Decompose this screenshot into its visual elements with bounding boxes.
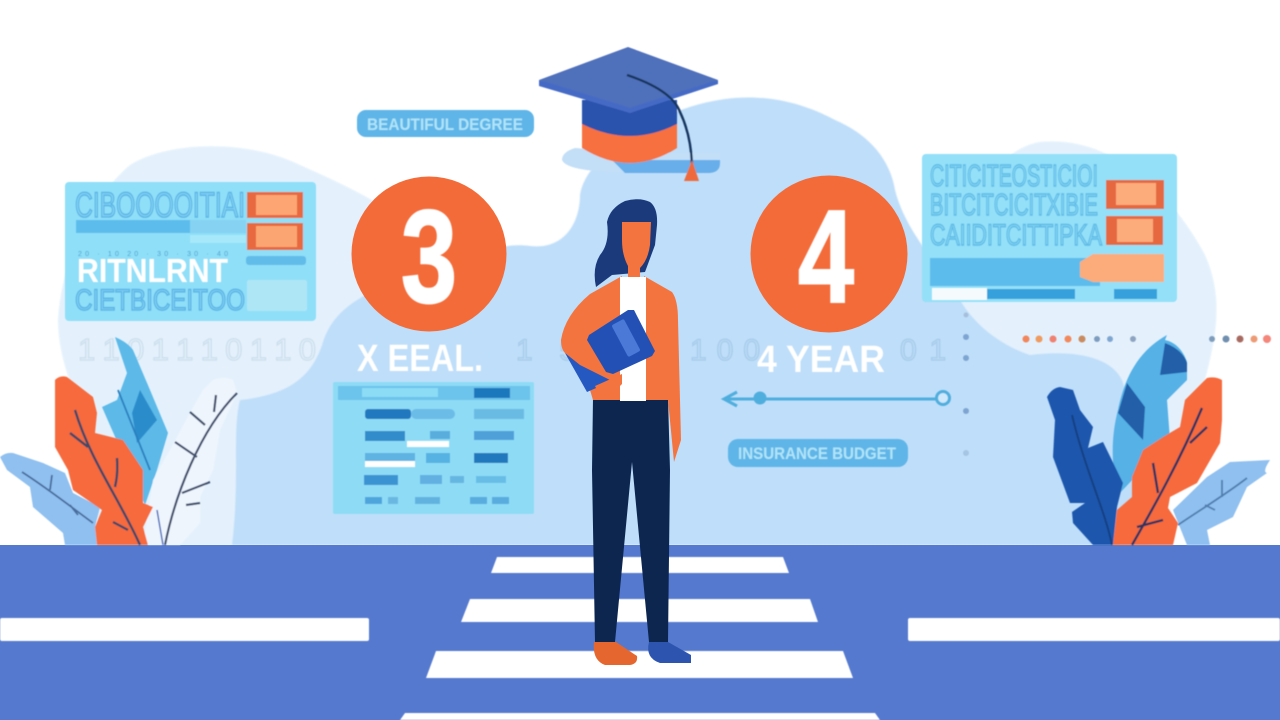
crosswalk stripes xyxy=(400,557,880,720)
background binary text centre: 0 1 xyxy=(900,334,946,367)
book xyxy=(587,310,655,374)
card text lines: CITICITEOSTICIOI xyxy=(930,158,1098,193)
background binary text left: 1 1 0 1 1 1 0 1 1 0 xyxy=(78,332,316,367)
book back xyxy=(565,353,612,392)
panel: right data card xyxy=(922,154,1177,302)
panel: left data card: CIETBICEITOO xyxy=(75,284,245,317)
dotted row right xyxy=(1022,335,1271,343)
card text lines: BITCITCICITXIBIE xyxy=(930,187,1098,222)
hand xyxy=(595,374,622,396)
panel: left data card: 20 · 10 20 · 30 · 30 · 40 xyxy=(78,251,228,258)
circle: 3 xyxy=(352,176,506,332)
neck and face xyxy=(622,222,651,278)
panel: table card xyxy=(333,382,534,514)
background binary text centre xyxy=(516,334,946,367)
hair xyxy=(595,199,657,287)
person: student xyxy=(561,199,691,665)
icon: graduation cap xyxy=(539,47,720,181)
dotted column right xyxy=(963,312,969,456)
shoe right xyxy=(648,642,691,663)
card text line: CIBOOOOITIAI xyxy=(75,186,245,225)
background binary text centre: 1 0 0 xyxy=(690,334,760,367)
orange buttons xyxy=(1106,180,1164,245)
icon: right foliage xyxy=(1047,335,1270,545)
arrow: timeline xyxy=(724,392,950,406)
shirt xyxy=(620,277,646,401)
jacket xyxy=(561,276,681,462)
lane dashes xyxy=(0,618,1280,641)
panel: top pill label xyxy=(357,110,534,137)
orange buttons xyxy=(247,192,303,250)
circle: 4: 4 xyxy=(798,183,854,330)
card text lines xyxy=(930,158,1102,252)
shoe left xyxy=(594,642,637,665)
label: 4 year: 4 YEAR xyxy=(757,339,885,381)
panel: bottom pill label xyxy=(728,439,908,467)
label: 3 year: X EEAL. xyxy=(357,338,483,380)
panel: bottom pill label: INSURANCE BUDGET xyxy=(738,444,897,463)
panel: top pill label: BEAUTIFUL DEGREE xyxy=(367,115,523,134)
circle: 4 xyxy=(750,176,908,332)
pants xyxy=(592,398,670,642)
background blobs xyxy=(58,97,1217,545)
panel: left data card xyxy=(65,182,316,321)
icon: left foliage xyxy=(0,337,237,545)
background binary text centre: 1 5 xyxy=(516,334,576,367)
white heading on card: RITNLRNT xyxy=(77,252,228,289)
road xyxy=(0,545,1280,720)
card text lines: CAIIDITCITTIPKA xyxy=(930,219,1102,252)
circle: 3: 3 xyxy=(401,183,457,330)
